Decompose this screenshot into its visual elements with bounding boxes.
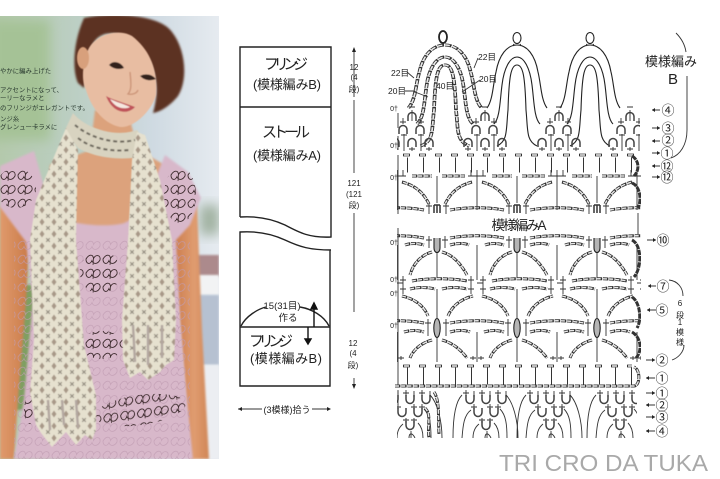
- label: stole: (模様編みA): [253, 148, 321, 163]
- arrows: up and down: [305, 303, 317, 344]
- row numbers, top: ⑫: [660, 170, 674, 185]
- repeating stitch pattern A: [397, 155, 641, 384]
- label: stitches to make: 作る: [278, 312, 298, 324]
- arms: [0, 205, 209, 459]
- scarf right strand: [122, 132, 176, 380]
- top fringe arches: [391, 31, 651, 151]
- scarf: [30, 113, 176, 447]
- dress: [0, 151, 201, 459]
- label: stole: [253, 124, 321, 163]
- mouth: [106, 96, 135, 112]
- row numbers, bottom: ②: [655, 398, 669, 413]
- dimension: width: [238, 404, 331, 415]
- label: fringe bottom: [249, 333, 322, 366]
- bracket: 6 rows per repeat: 1: [678, 318, 683, 327]
- label: fringe top: [253, 56, 321, 92]
- bracket: 6 rows per repeat: 6: [678, 299, 683, 308]
- dimension: height: 121: [347, 179, 361, 188]
- stitch counts: 20目: [388, 86, 406, 96]
- crochet edge marks: 0†: [390, 277, 398, 284]
- panel: scarf schematic: [238, 47, 363, 415]
- label: fringe bottom: (模様編みB): [250, 351, 322, 366]
- heading: pattern B: 模様編み: [645, 54, 697, 69]
- row numbers, top: ②: [661, 133, 675, 148]
- caption text in photo: ンジ糸: [0, 114, 20, 123]
- dimension: width: (3模様)拾う: [264, 404, 310, 415]
- stitch counts: [388, 52, 497, 97]
- caption text in photo: やかに編み上げた: [0, 66, 51, 75]
- row numbers, top: ①: [660, 146, 674, 161]
- label: stole: ストール: [262, 124, 310, 141]
- row numbers, pattern A: ⑩: [656, 233, 670, 248]
- dimension: height: (4: [350, 73, 358, 82]
- bracket: 6 rows per repeat: [669, 280, 684, 360]
- row numbers, bottom: [646, 371, 669, 439]
- heading: pattern B: B: [668, 71, 678, 88]
- dimension: height: 段): [348, 361, 359, 370]
- crochet edge marks: 0†: [390, 175, 398, 182]
- watermark: TRI CRO DA TUKA: [499, 450, 709, 476]
- dimension: height: 段): [349, 201, 360, 210]
- bracket: 6 rows per repeat: 段: [676, 311, 684, 320]
- face: [77, 33, 156, 127]
- scarf neck band: [65, 113, 143, 158]
- label: fringe top: フリンジ: [264, 56, 308, 73]
- long base chain with short chains: [395, 366, 639, 386]
- row numbers, pattern A: ⑤: [655, 303, 669, 318]
- caption text in photo: アクセントになって、: [0, 86, 63, 94]
- row numbers, top: ③: [661, 121, 675, 136]
- dimension: height: [346, 47, 363, 389]
- caption text in photo: [0, 66, 89, 131]
- row numbers, pattern A: [646, 233, 670, 368]
- dimension: height: 12: [350, 63, 359, 72]
- photo background: [0, 16, 219, 459]
- crochet edge marks: 0†: [390, 323, 398, 330]
- schematic outline: [240, 47, 331, 386]
- fringe slots: [48, 325, 162, 430]
- row numbers, top: ⑫: [660, 159, 674, 174]
- photo: woman wearing crochet scarf: [0, 15, 219, 459]
- crochet edge marks: 0†: [390, 143, 398, 150]
- stitch counts: 20目: [479, 74, 497, 84]
- row numbers, bottom: ①: [655, 371, 669, 386]
- scarf left strand: [30, 128, 96, 447]
- label: stitches to make: [264, 301, 300, 324]
- dimension: height: 12: [349, 339, 358, 348]
- bracket: 6 rows per repeat: 様: [676, 337, 684, 347]
- row numbers, top: [652, 103, 675, 185]
- heading: pattern B: [645, 33, 697, 158]
- stitch counts: 22目: [391, 68, 409, 78]
- dimension: height: 段): [349, 85, 360, 94]
- bottom fringe: [397, 390, 637, 438]
- panel: crochet chart: [388, 30, 696, 438]
- row numbers, bottom: ③: [655, 410, 669, 425]
- caption text in photo: グレンュー卡ラメに: [0, 122, 57, 131]
- dimension: height: (121: [346, 190, 363, 199]
- heading: pattern A: 模様編みA: [492, 218, 546, 233]
- row numbers, top: ④: [661, 103, 675, 118]
- bracket: 6 rows per repeat: 模: [676, 327, 684, 337]
- stitch counts: 22目: [478, 52, 496, 62]
- row of short chains and posts, top: [403, 155, 638, 176]
- label: fringe bottom: フリンジ: [249, 333, 293, 350]
- row numbers, pattern A: ②: [655, 353, 669, 368]
- hair: [74, 15, 184, 113]
- neck and chest: [48, 110, 165, 232]
- caption text in photo: ーリーなラメと: [0, 94, 45, 102]
- row numbers, pattern A: ⑦: [656, 279, 670, 294]
- eyes: [109, 62, 156, 80]
- stitch counts: 40目: [436, 81, 454, 91]
- row numbers, bottom: ④: [655, 424, 669, 439]
- caption text in photo: のフリンジがエレガントです。: [0, 103, 89, 112]
- row numbers, bottom: ①: [655, 386, 669, 401]
- crochet edge marks: 0†: [390, 106, 398, 113]
- crochet edge marks: [390, 106, 398, 330]
- crochet edge marks: 0†: [390, 240, 398, 247]
- dimension: height: (4: [349, 349, 357, 358]
- crochet edge marks: 0†: [390, 291, 398, 298]
- label: fringe top: (模様編みB): [253, 77, 321, 92]
- label: stitches to make: 15(31目): [264, 301, 300, 312]
